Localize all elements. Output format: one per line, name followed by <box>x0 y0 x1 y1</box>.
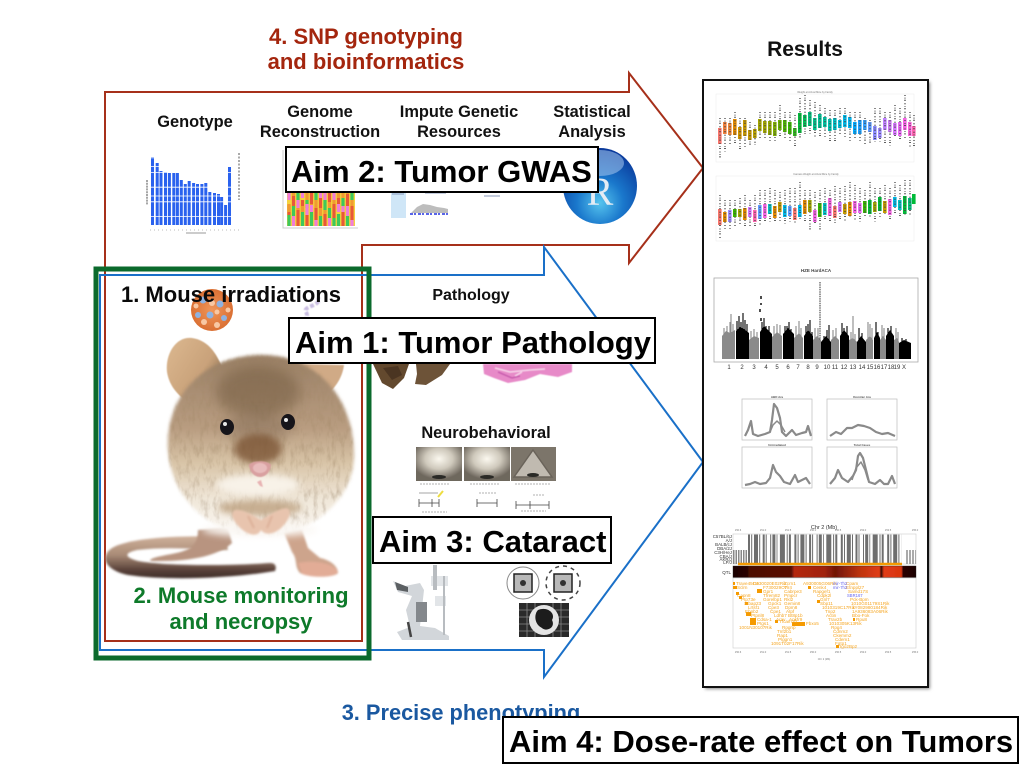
gene track: Igo2Bp2 <box>840 644 858 649</box>
gene track: Rpgrip <box>782 625 796 630</box>
callout: Aim 1 Tumor Pathology: Aim 1: Tumor Pathology <box>295 325 652 360</box>
gene track: Rapgef1 <box>813 589 831 594</box>
label: Mouse monitoring and necropsy: and necropsy <box>169 609 313 634</box>
map axes: 151.5 <box>785 650 792 654</box>
strain matrix: BALB/cJ <box>715 542 732 547</box>
gene track: Tfcam2b <box>779 619 797 624</box>
gene track: Ptgs1 <box>757 621 769 626</box>
strain matrix: C57BL/6J <box>713 534 732 539</box>
mouse ears <box>167 338 344 410</box>
gene track: Gorelbp1 <box>763 597 782 602</box>
chart: impute genetic resources <box>391 192 500 218</box>
column heading: Impute Genetic Resources: Impute Genetic <box>400 103 518 121</box>
icon: R logo <box>563 148 637 224</box>
mouse hind legs <box>150 528 338 577</box>
arrow: Aim 1 and 3 blue block arrow <box>100 247 703 677</box>
strain matrix: Chr 2 (Mb) <box>811 525 837 531</box>
gene track: Cdnm2 <box>833 629 848 634</box>
chart: Manhattan plot: 11 <box>832 365 839 371</box>
diagram: conditioning timeline <box>419 484 550 512</box>
map axes: 155.0 <box>912 650 919 654</box>
gene track: Cabrpe3 <box>784 589 802 594</box>
box: mouse monitoring <box>96 269 369 658</box>
chart: four LOD plots: Dominic Ara <box>853 395 871 399</box>
gene track: Rkl2 <box>784 597 794 602</box>
gene track: Cdsa-1 <box>757 617 772 622</box>
gene track: Trav2b <box>828 617 843 622</box>
gene track: Gnl7 <box>820 597 830 602</box>
gene track: Pmpcr <box>784 593 798 598</box>
strain matrix: C3H/HeJ <box>714 550 732 555</box>
chart: Manhattan plot: 15 <box>867 365 874 371</box>
chart: genotype marker bars <box>147 153 240 233</box>
map axes: 151.5 <box>785 528 792 532</box>
chart: Manhattan plot: 1 <box>727 365 731 371</box>
QTL heatmap: QTL <box>722 570 731 575</box>
gene track: Ckemm2 <box>833 633 852 638</box>
image: histology section <box>483 364 572 383</box>
strain matrix: A/J <box>726 538 732 543</box>
QTL heatmap <box>722 566 916 578</box>
gene track: 1010319C17Rik <box>822 605 856 610</box>
gene track: Actin <box>826 613 837 618</box>
gene track: Lrtsf1 <box>748 605 760 610</box>
chart: four LOD plots <box>742 395 897 488</box>
map axes: Chr 2 (Mb) <box>818 657 830 661</box>
map axes: 151.0 <box>760 528 767 532</box>
chart: Manhattan plot: 8 <box>806 365 810 371</box>
label: Mouse monitoring and necropsy <box>133 583 349 634</box>
gene track: Zcrn1 <box>784 581 796 586</box>
gene track: Gpr1 <box>763 589 774 594</box>
label: Mouse monitoring and necropsy: 2. Mouse monitoring <box>133 583 349 608</box>
gene track: 1010305K13Rik <box>829 621 862 626</box>
gene track: Ptp73e <box>741 597 756 602</box>
map axes: 153.5 <box>885 650 892 654</box>
heading: SNP genotyping and bioinformatics: 4. SNP genotyping <box>269 24 463 49</box>
chart: four LOD plots: ABD Ara <box>771 395 783 399</box>
mouse body <box>168 355 354 536</box>
gene track: mir-7h2 <box>833 585 848 590</box>
chart: weight boxplots <box>716 91 916 162</box>
gene track: Tnp2 <box>825 609 836 614</box>
column heading: Statistical Analysis: Analysis <box>558 123 626 141</box>
gene track: Stbap23 <box>744 601 762 606</box>
image: mouse <box>105 338 354 578</box>
gene track: SBR167 <box>847 593 863 598</box>
gene track: Rpg4 <box>831 625 842 630</box>
gene track: Ankfr9 <box>789 617 803 622</box>
heading: SNP genotyping and bioinformatics <box>268 24 464 74</box>
gene track: 1A936083A06Rik <box>852 609 888 614</box>
gene track: A930005G06Rik <box>803 581 837 586</box>
icon: irradiation particle ball <box>191 289 233 331</box>
gene track: Tlr4 <box>784 585 792 590</box>
gene track: Samd17S <box>848 589 868 594</box>
column heading: Genome Reconstruction: Genome <box>287 103 353 121</box>
column heading: Statistical Analysis: Statistical <box>553 103 631 121</box>
gene track: Rap1 <box>777 633 788 638</box>
gene track: Bbo-Fok <box>852 613 870 618</box>
gene track: 1Y082980184Rik <box>852 605 888 610</box>
gene track: Gemin8 <box>784 601 801 606</box>
map axes: 150.0 <box>810 650 817 654</box>
gene track: Cdem1 <box>835 637 850 642</box>
mouse eyes <box>220 414 295 435</box>
icon: R logo: R <box>587 169 614 214</box>
gene track: Gpck1 <box>768 601 782 606</box>
column heading: Statistical Analysis <box>553 103 631 141</box>
chart: Manhattan plot: 6 <box>786 365 790 371</box>
strain matrix <box>713 525 916 565</box>
mouse tail <box>105 536 276 578</box>
column heading: Genome Reconstruction: Reconstruction <box>260 123 380 141</box>
gene track: Ldhb7 <box>774 613 787 618</box>
gene track: Tfrem82 <box>763 593 781 598</box>
gene track: Arav <box>776 617 786 622</box>
chart: Manhattan plot: 16 <box>874 365 881 371</box>
gene track: 1001N30107Rik <box>739 625 773 630</box>
image: fear conditioning chambers <box>416 447 556 481</box>
mouse nose and mouth <box>249 461 271 487</box>
gene track: F730029O7 <box>763 585 788 590</box>
gene track: Cpe3 <box>768 605 779 610</box>
heading: SNP genotyping and bioinformatics: and bioinformatics <box>268 49 464 74</box>
gene track: Fgtp1 <box>835 641 847 646</box>
gene track: Cenk4 <box>813 585 827 590</box>
map axes: 150.6 <box>735 528 742 532</box>
gene track: Ebpb2 <box>745 609 759 614</box>
gene track: Dpm8 <box>785 605 798 610</box>
heading: Results: Results <box>767 38 843 61</box>
column heading: Genotype: Genotype <box>157 113 233 131</box>
strain matrix: LP/J <box>723 560 732 565</box>
map axes <box>735 528 919 661</box>
column heading: Neurobehavioral: Neurobehavioral <box>421 424 551 442</box>
gene track: Ptpnl8 <box>751 613 764 618</box>
gene track: Sclrn <box>737 585 748 590</box>
mouse paws <box>232 508 290 535</box>
column heading: Genome Reconstruction <box>260 103 380 141</box>
chart: Manhattan plot <box>714 268 918 371</box>
chart: Manhattan plot: HZE HardACA <box>801 268 832 273</box>
column heading: Pathology: Pathology <box>432 287 510 304</box>
chart: Manhattan plot: 18 <box>888 365 895 371</box>
map axes: 150.5 <box>835 528 842 532</box>
chart: Manhattan plot: 10 <box>824 365 831 371</box>
gene track: Sbp11 <box>820 601 833 606</box>
gene track: mir-7h2 <box>833 581 848 586</box>
image: slit lamp microscope <box>393 565 449 640</box>
gene track: Trave45Ca <box>736 581 759 586</box>
mouse face shading <box>202 366 318 537</box>
chart: Manhattan plot: 9 <box>815 365 819 371</box>
chart: Manhattan plot: 13 <box>850 365 857 371</box>
chart: Manhattan plot: 7 <box>796 365 800 371</box>
chart: Manhattan plot: 19 <box>894 365 901 371</box>
chart: Manhattan plot: 3 <box>752 365 756 371</box>
callout: Aim 4 Dose-rate effect on Tumors: Aim 4: Dose-rate effect on Tumors <box>509 724 1013 759</box>
gene track: Rpu8 <box>856 617 867 622</box>
callout: Aim 2 Tumor GWAS: Aim 2: Tumor GWAS <box>291 154 592 189</box>
strain matrix: AKR/J <box>720 557 732 562</box>
chart: carcass weight boxplots <box>716 173 916 241</box>
map axes: 153.5 <box>885 528 892 532</box>
chart: Manhattan plot: 4 <box>764 365 768 371</box>
chart: Manhattan plot: 17 <box>881 365 888 371</box>
chart: haplotype and QTL map <box>713 525 919 661</box>
chart: Manhattan plot: 12 <box>841 365 848 371</box>
chart: Manhattan plot: 5 <box>775 365 779 371</box>
gene track <box>733 578 916 649</box>
map axes: 155.0 <box>912 528 919 532</box>
map axes: 150.6 <box>735 650 742 654</box>
gene track: Atpf <box>786 609 795 614</box>
chart: carcass weight boxplots: Carcass Weight at Arrival Mice by Family <box>793 173 839 176</box>
gene track: Cpam <box>846 581 858 586</box>
chart: four LOD plots: Unirradiated <box>768 443 786 447</box>
gene track: 1010G01179S1Rik <box>851 601 890 606</box>
map axes: 150.5 <box>835 650 842 654</box>
map axes: 150.0 <box>810 528 817 532</box>
image: optomotor drum <box>507 566 580 637</box>
gene track: Plggn1 <box>778 637 793 642</box>
gene track: Capn8 <box>737 593 751 598</box>
column heading: Impute Genetic Resources: Resources <box>417 123 501 141</box>
label: Mouse irradiations: 1. Mouse irradiations <box>121 282 341 307</box>
chart: four LOD plots: Total Cases <box>854 443 871 447</box>
map axes: 151.0 <box>760 650 767 654</box>
icon: DNA strand <box>295 298 319 335</box>
chart: Manhattan plot: 2 <box>740 365 744 371</box>
map axes: 153.0 <box>860 650 867 654</box>
chart: Manhattan plot: 14 <box>859 365 866 371</box>
column heading: Impute Genetic Resources <box>400 103 518 141</box>
label: Precise phenotyping: 3. Precise phenotyping <box>342 700 580 725</box>
gene track: Tnf2b1 <box>777 629 792 634</box>
chart: weight boxplots: Weight at Arrival Mice by Family <box>797 91 834 94</box>
chart: Manhattan plot: X <box>902 365 906 371</box>
gene track: Fbxo5 <box>806 621 819 626</box>
gene track: Cpe1 <box>770 609 781 614</box>
strain matrix: DBA/2J <box>717 546 732 551</box>
image: tumor tissue <box>373 364 450 389</box>
gene track: D930020E02Rik <box>753 581 787 586</box>
gene track: 1091T02F17Rik <box>771 641 804 646</box>
gene track: Etnppl27 <box>846 585 865 590</box>
chart: genome reconstruction stacked bars <box>283 150 358 228</box>
gene track: Cdpk2l <box>817 593 831 598</box>
gene track: Pck-Bpm <box>850 597 869 602</box>
panel: results <box>703 80 930 689</box>
strain matrix: CBA/J <box>720 554 732 559</box>
gene track: Bt8p1b <box>788 613 803 618</box>
map axes: 153.0 <box>860 528 867 532</box>
arrow: Aim 2 red block arrow <box>105 73 703 641</box>
callout: Aim 3 Cataract: Aim 3: Cataract <box>379 524 606 559</box>
